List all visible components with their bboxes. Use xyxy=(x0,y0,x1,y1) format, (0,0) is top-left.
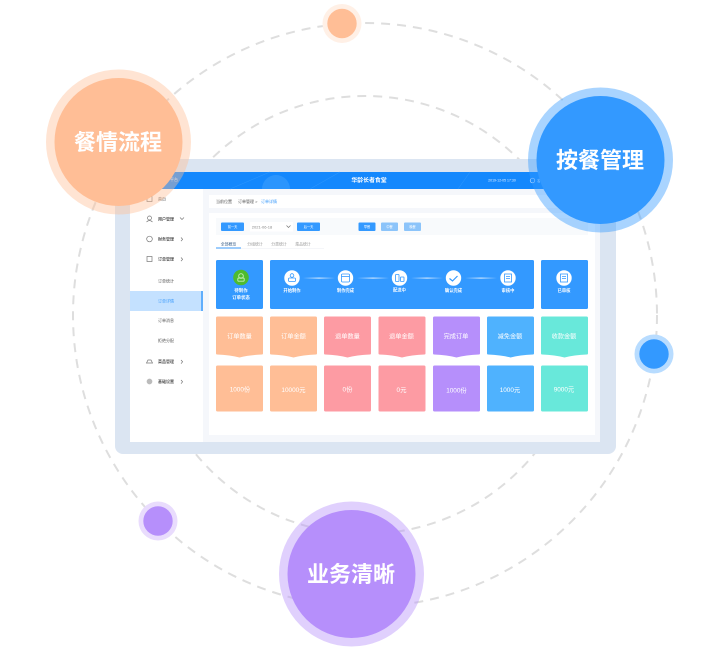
card: order flow steps xyxy=(270,260,534,309)
main content panel xyxy=(209,213,595,435)
date and meal toolbar: 早餐 xyxy=(364,224,371,229)
sidebar navigation: 拒绝分配 xyxy=(158,337,174,343)
stat value: completed orders: 1000份 xyxy=(446,386,467,394)
dashboard header bar: 平台 xyxy=(170,176,178,182)
card: pending status xyxy=(216,260,263,309)
card: reviewed xyxy=(541,260,588,309)
breadcrumb: 当前位置 xyxy=(216,198,232,204)
statistic tabs xyxy=(216,241,324,249)
sidebar navigation: 首页 xyxy=(158,196,166,202)
step: confirmed: 确认完成 xyxy=(445,287,463,294)
badge: manage by meal: 按餐管理 xyxy=(556,148,644,173)
date and meal toolbar xyxy=(216,218,588,235)
stat headers row xyxy=(216,316,588,358)
stat value: refund amount: 0元 xyxy=(397,386,407,394)
stat header: refund count: 退单数量 xyxy=(335,332,360,340)
stat header: discount amount xyxy=(487,316,534,358)
stat value: order count: 1000份 xyxy=(230,384,251,394)
stat header: order count xyxy=(216,316,263,358)
node: small orange dot xyxy=(322,4,362,43)
breadcrumb: 订单详情 xyxy=(261,198,277,204)
stat header: refund amount xyxy=(378,316,426,358)
step: delivering xyxy=(392,270,407,294)
stat values row xyxy=(216,366,588,412)
sidebar navigation: 订单消息 xyxy=(158,317,174,323)
dashboard screenshot frame xyxy=(115,159,616,454)
step: start cooking: 开始制作 xyxy=(283,287,301,294)
stat value: refund amount xyxy=(378,366,426,412)
step: cooking done xyxy=(337,270,355,294)
stat header: discount amount: 减免金额 xyxy=(498,332,523,340)
sidebar navigation: 菜品管理 xyxy=(158,358,174,364)
statistic tabs: 分组统计 xyxy=(247,241,263,246)
sidebar navigation: 订单管理 xyxy=(158,256,174,262)
badge: clear business xyxy=(279,502,424,646)
stat value: discount amount xyxy=(487,366,534,412)
sidebar navigation: 用户管理 xyxy=(158,216,174,222)
dashboard header bar: 2019-12-05 17:30 xyxy=(488,178,516,182)
stat value: refund count xyxy=(324,366,371,412)
node: small purple dot xyxy=(138,502,178,540)
stat header: completed orders: 完成订单 xyxy=(444,332,468,340)
stat header: order count: 订单数量 xyxy=(227,332,252,340)
date and meal toolbar: 后一天 xyxy=(304,224,314,229)
dashboard header bar xyxy=(130,172,600,189)
dashed orbit rings xyxy=(73,23,657,607)
stat header: received amount: 收款金额 xyxy=(552,332,577,340)
statistic tabs: 分类统计 xyxy=(271,241,287,246)
stat value: order amount xyxy=(270,366,317,412)
sidebar navigation xyxy=(130,189,203,442)
card: reviewed: 已审核 xyxy=(558,287,571,294)
sidebar navigation: 订单统计 xyxy=(158,278,174,284)
stat header: received amount xyxy=(541,316,588,358)
dashboard header bar: 名 xyxy=(537,178,540,183)
stat value: received amount xyxy=(541,366,588,412)
stat header: order amount xyxy=(270,316,317,358)
breadcrumb xyxy=(209,195,595,208)
date and meal toolbar: 2021-06-18 xyxy=(252,224,273,229)
step: cooking done: 制作完成 xyxy=(337,287,355,294)
stat value: discount amount: 1000元 xyxy=(500,386,521,394)
stat value: refund count: 0份 xyxy=(343,384,353,394)
step: confirmed xyxy=(445,270,463,294)
date and meal toolbar: 前一天 xyxy=(228,224,238,229)
stat header: completed orders xyxy=(433,316,480,358)
step: delivering: 配送中 xyxy=(393,286,406,294)
stat header: order amount: 订单金额 xyxy=(281,332,307,340)
stat value: completed orders xyxy=(433,366,480,412)
date and meal toolbar: 晚餐 xyxy=(409,224,416,229)
stat header: refund amount: 退单金额 xyxy=(389,332,415,340)
stat value: order count xyxy=(216,366,263,412)
step: reviewing: 审核中 xyxy=(502,287,514,294)
icon: green pending badge xyxy=(233,270,249,285)
step: start cooking xyxy=(283,270,301,294)
badge: manage by meal xyxy=(528,88,673,232)
sidebar navigation: 财务管理 xyxy=(158,236,174,242)
date and meal toolbar: 中餐 xyxy=(386,224,393,229)
badge: clear business: 业务清晰 xyxy=(307,562,395,587)
dashboard header bar: 华龄长者食堂 xyxy=(351,176,387,184)
stat value: received amount: 9000元 xyxy=(554,386,575,394)
breadcrumb: 订单管理 > xyxy=(238,198,258,204)
sidebar navigation: 订单详情 xyxy=(158,298,174,304)
card: pending status: 订单状态 xyxy=(232,294,250,301)
card: pending status: 待制作 xyxy=(234,287,248,294)
sidebar navigation: 基础设置 xyxy=(158,378,174,384)
node: small blue dot xyxy=(634,334,674,374)
badge: meal process: 餐情流程 xyxy=(74,130,162,155)
statistic tabs: 全部概览 xyxy=(221,241,236,246)
stat header: refund count xyxy=(324,316,371,358)
badge: meal process xyxy=(46,70,191,214)
step: reviewing xyxy=(500,270,516,294)
stat value: order amount: 10000元 xyxy=(281,386,306,394)
statistic tabs: 菜品统计 xyxy=(295,241,311,246)
